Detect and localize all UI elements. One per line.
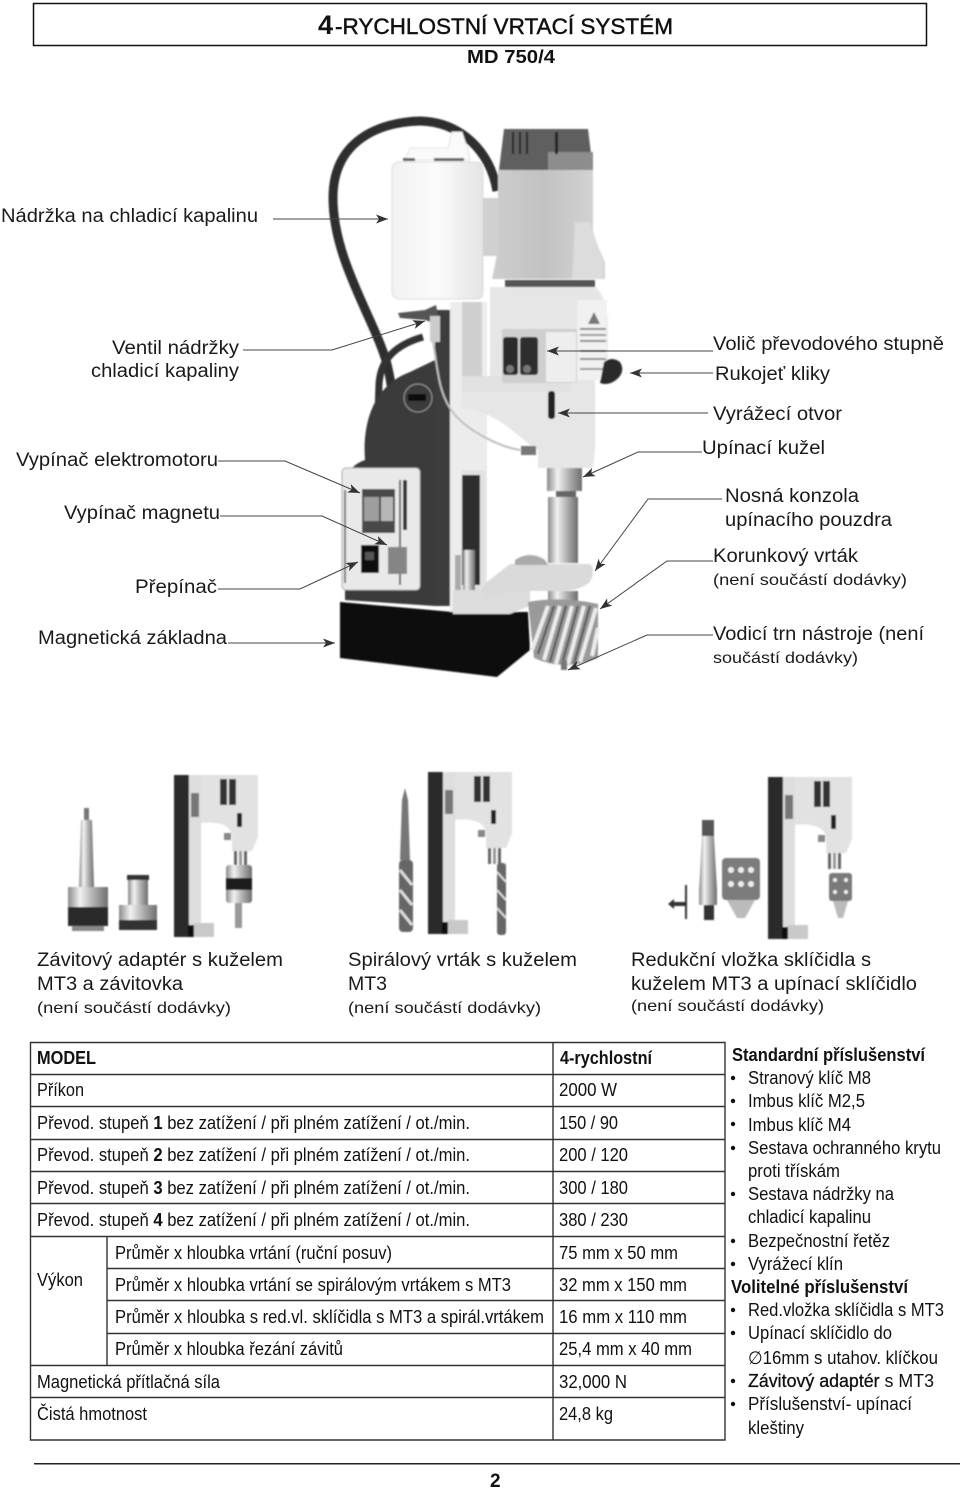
accessories list: ∅16mm s utahov. klíčkou xyxy=(748,1348,938,1368)
accessories list: Red.vložka sklíčidla s MT3 xyxy=(748,1300,944,1320)
specification table: 2000 W xyxy=(559,1080,617,1100)
arrow: handle xyxy=(630,372,713,374)
left callouts: chladicí kapaliny xyxy=(91,361,240,382)
right callouts xyxy=(702,334,944,667)
gear selector panel xyxy=(502,329,577,383)
title: MD 750/4 xyxy=(467,47,555,67)
right callouts: Korunkový vrták xyxy=(713,546,859,567)
title: 4 xyxy=(318,10,333,40)
motor switch xyxy=(362,489,395,533)
motor top cap xyxy=(499,129,593,170)
arrow: pilot xyxy=(568,635,713,670)
specification table: 16 mm x 110 mm xyxy=(559,1307,687,1327)
caption 2: Spirálový vrták s kuželem xyxy=(348,950,577,971)
specification table: 150 / 90 xyxy=(559,1113,618,1133)
caption 2: MT3 xyxy=(348,974,387,995)
accessories list: Závitový adaptér s MT3 xyxy=(748,1371,934,1391)
column dark xyxy=(435,310,452,606)
arrow: ejector xyxy=(558,412,708,414)
specification table: 380 / 230 xyxy=(559,1210,628,1230)
left callouts xyxy=(1,206,258,649)
right callouts: Rukojeť kliky xyxy=(715,364,831,385)
accessory photo 1: tapping adapter xyxy=(68,775,258,937)
accessories list: Sestava ochranného krytu xyxy=(748,1138,941,1158)
accessories list: kleštiny xyxy=(748,1418,804,1438)
magnet switch xyxy=(361,545,379,573)
left callouts: Přepínač xyxy=(135,577,217,598)
accessories list: Upínací sklíčidlo do xyxy=(748,1323,892,1343)
caption 2: (není součástí dodávky) xyxy=(348,1000,541,1017)
left callouts: Ventil nádržky xyxy=(112,338,240,359)
clear tube xyxy=(433,341,520,450)
specification table: Převod. stupeň 4 bez zatížení / při plném zatížení / ot./min. xyxy=(37,1210,470,1230)
specification table: 4-rychlostní xyxy=(560,1048,653,1068)
arrow: selector xyxy=(218,562,358,589)
arrow: magnetic base xyxy=(228,642,335,644)
specification table: Příkon xyxy=(37,1080,84,1100)
magnet housing dark xyxy=(345,360,435,606)
spindle xyxy=(547,468,582,491)
bracket xyxy=(483,564,593,600)
selector xyxy=(388,547,407,574)
specification table: 32,000 N xyxy=(559,1372,627,1392)
accessories list: proti třískám xyxy=(748,1161,840,1181)
specification table: 32 mm x 150 mm xyxy=(559,1275,687,1295)
chuck key xyxy=(668,885,687,919)
gear housing xyxy=(462,287,608,468)
accessories list xyxy=(731,1045,944,1438)
arrow: magnet switch xyxy=(220,516,387,545)
right callouts: součástí dodávky) xyxy=(713,650,858,667)
chuck xyxy=(722,858,760,918)
leader lines and arrows xyxy=(218,219,722,670)
accessory photo 3: drill chuck xyxy=(668,777,852,939)
caption 1: MT3 a závitovka xyxy=(37,974,183,995)
taper sleeve xyxy=(699,820,717,920)
accessories list: Imbus klíč M2,5 xyxy=(748,1091,865,1111)
slide xyxy=(453,576,530,614)
specification table: Průměr x hloubka vrtání (ruční posuv) xyxy=(115,1243,392,1263)
right callouts: upínacího pouzdra xyxy=(725,510,892,531)
caption 3: Redukční vložka sklíčidla s xyxy=(631,950,871,971)
title: -RYCHLOSTNÍ VRTACÍ SYSTÉM xyxy=(335,14,673,39)
accessories list: Sestava nádržky na xyxy=(748,1184,895,1204)
ejector slot xyxy=(548,391,555,419)
specification table: Průměr x hloubka vrtání se spirálovým vrtákem s MT3 xyxy=(115,1275,511,1295)
coolant tank xyxy=(392,162,483,299)
arrow: tank xyxy=(273,218,388,220)
arrow: cutter xyxy=(600,561,713,609)
accessories list: Příslušenství- upínací xyxy=(748,1394,912,1414)
accessory photo 2: twist drill xyxy=(399,772,512,935)
right callouts: Upínací kužel xyxy=(702,438,825,459)
column light xyxy=(450,302,487,612)
arrow: bracket xyxy=(595,499,722,571)
arrow: valve xyxy=(243,321,425,350)
motor body xyxy=(492,170,605,279)
specification table: 75 mm x 50 mm xyxy=(559,1243,678,1263)
arrow: motor switch xyxy=(218,461,360,493)
specification table: 25,4 mm x 40 mm xyxy=(559,1339,692,1359)
handle xyxy=(600,359,622,384)
warning label xyxy=(577,300,607,380)
specification table: Převod. stupeň 3 bez zatížení / při plném zatížení / ot./min. xyxy=(37,1178,470,1198)
tap holder xyxy=(119,875,157,930)
knob xyxy=(404,384,432,412)
left callouts: Nádržka na chladicí kapalinu xyxy=(1,206,258,227)
title xyxy=(34,4,926,67)
main photo: magnetic drill xyxy=(333,121,622,677)
specification table: Průměr x hloubka s red.vl. sklíčidla s MT3 a spirál.vrtákem xyxy=(115,1307,544,1327)
annular cutter xyxy=(528,599,598,665)
motor connection xyxy=(483,198,503,256)
control panel xyxy=(342,468,420,590)
accessories list: Stranový klíč M8 xyxy=(748,1068,871,1088)
specification table: MODEL xyxy=(37,1048,96,1068)
footer rule xyxy=(34,1463,960,1464)
second hose xyxy=(377,337,423,445)
right callouts: (není součástí dodávky) xyxy=(713,572,907,589)
accessories list: chladicí kapalinu xyxy=(748,1207,871,1227)
caption 3: kuželem MT3 a upínací sklíčidlo xyxy=(631,974,917,995)
specification table: 300 / 180 xyxy=(559,1178,628,1198)
caption 1: Závitový adaptér s kuželem xyxy=(37,950,283,971)
left callouts: Vypínač elektromotoru xyxy=(16,450,218,471)
caption 1: (není součástí dodávky) xyxy=(37,1000,231,1017)
coolant hose xyxy=(333,121,497,448)
left callouts: Magnetická základna xyxy=(38,628,227,649)
heading: standard accessories: Standardní příslušenství xyxy=(732,1045,926,1065)
caption 3 xyxy=(631,950,917,1015)
specification table: Průměr x hloubka řezání závitů xyxy=(115,1339,343,1359)
taper drill xyxy=(399,788,413,932)
specification table: Převod. stupeň 2 bez zatížení / při plném zatížení / ot./min. xyxy=(37,1145,470,1165)
right callouts: Vodicí trn nástroje (není xyxy=(713,624,925,645)
caption 1 xyxy=(37,950,283,1017)
specification table: Čistá hmotnost xyxy=(37,1403,147,1424)
arrow: taper xyxy=(583,452,702,477)
caption 2 xyxy=(348,950,577,1017)
right callouts: Vyrážecí otvor xyxy=(713,404,843,425)
specification table: Výkon xyxy=(37,1270,83,1290)
specification table xyxy=(30,1042,725,1440)
accessories list: Imbus klíč M4 xyxy=(748,1115,851,1135)
right callouts: Volič převodového stupně xyxy=(713,334,944,355)
magnetic base xyxy=(340,602,530,677)
accessories list: Bezpečnostní řetěz xyxy=(748,1231,890,1251)
specification table: 24,8 kg xyxy=(559,1404,613,1424)
right callouts: Nosná konzola xyxy=(725,486,859,507)
arrow: gear selector xyxy=(547,350,713,352)
specification table: Magnetická přítlačná síla xyxy=(37,1372,221,1392)
left callouts: Vypínač magnetu xyxy=(64,503,220,524)
specification table: Převod. stupeň 1 bez zatížení / při plném zatížení / ot./min. xyxy=(37,1113,470,1133)
valve xyxy=(398,305,440,325)
specification table: 200 / 120 xyxy=(559,1145,628,1165)
taper with chuck xyxy=(68,808,108,931)
caption 3: (není součástí dodávky) xyxy=(631,998,824,1015)
heading: optional accessories: Volitelné příslušenství xyxy=(731,1277,909,1297)
accessories list: Vyrážecí klín xyxy=(748,1254,843,1274)
